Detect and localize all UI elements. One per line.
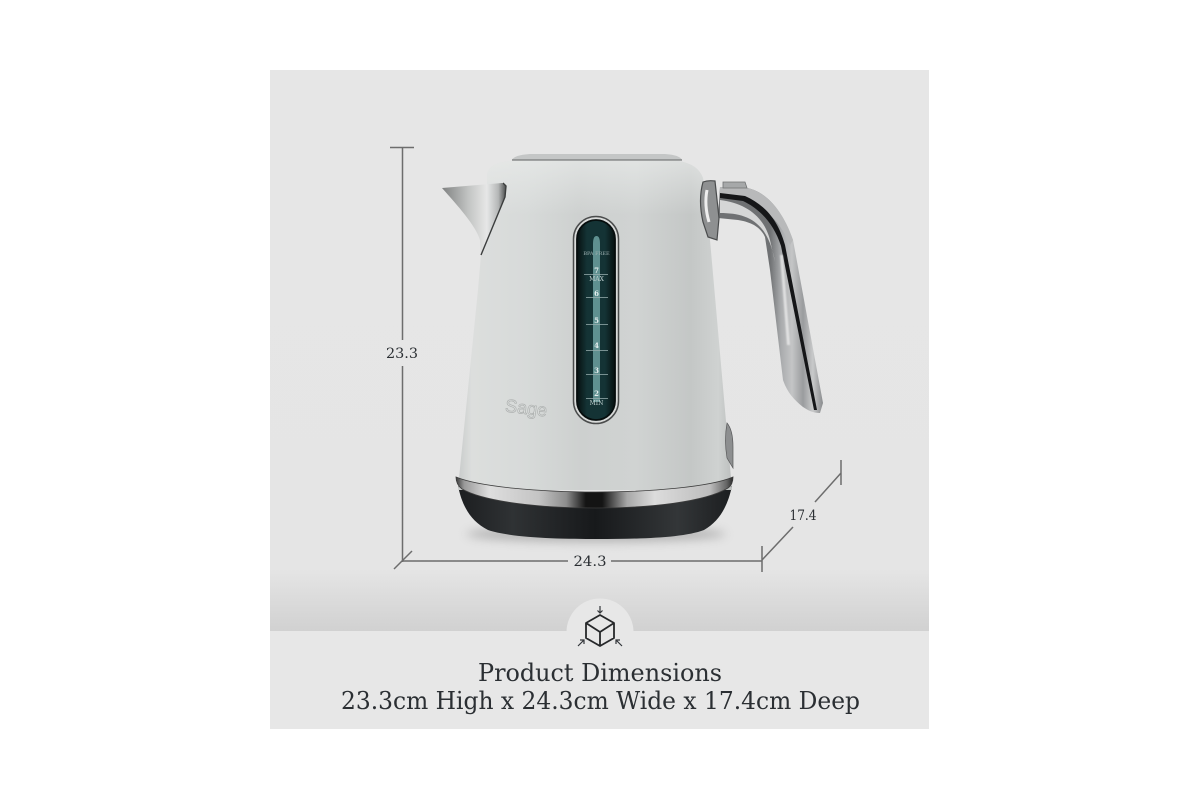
dimension: width: [394, 546, 762, 572]
icon badge: [566, 598, 634, 632]
gauge labels: BPA FREE: [583, 251, 610, 257]
window glass: [577, 220, 615, 420]
bracket highlight: [706, 190, 709, 222]
dimension: depth: [762, 460, 841, 560]
side switch: [726, 423, 733, 468]
width label: 24.3: [574, 554, 606, 570]
dimension: height: [386, 147, 418, 562]
window chrome frame: [574, 216, 618, 424]
height label: 23.3: [386, 346, 418, 362]
width line: [394, 546, 762, 572]
chrome band: [456, 477, 733, 508]
depth label: 17.4: [790, 508, 817, 524]
handle bracket: [700, 181, 719, 240]
panel: caption footer: [270, 631, 929, 729]
handle chrome: [718, 187, 823, 413]
caption title: Product Dimensions: [478, 659, 722, 687]
depth line: [762, 460, 841, 560]
lid rim: [512, 159, 682, 161]
gauge labels: 3: [594, 366, 599, 375]
handle: [700, 181, 823, 413]
handle dark reflection: [720, 193, 817, 410]
kettle base: [458, 486, 732, 539]
caption: [341, 659, 860, 715]
gauge labels: 2: [594, 389, 599, 398]
kettle lid: [512, 154, 682, 160]
handle top sheen: [720, 187, 793, 245]
gauge labels: 5: [594, 316, 599, 325]
kettle body: [458, 161, 732, 490]
gauge labels: MIN: [590, 400, 603, 407]
height line: [390, 147, 414, 562]
cube: [586, 615, 614, 646]
panel: background: [270, 70, 929, 631]
gauge labels: 6: [594, 289, 599, 298]
gauge labels: MAX: [589, 276, 605, 283]
water window: [574, 216, 618, 424]
gauge labels: 7: [594, 266, 599, 275]
gauge labels: 4: [594, 341, 599, 350]
handle lower highlight: [780, 255, 790, 345]
kettle: [442, 154, 823, 542]
spout chrome: [442, 183, 506, 255]
brand logo: Sage: [504, 396, 548, 421]
spout edge: [481, 183, 506, 255]
gauge ticks: [584, 274, 608, 398]
icon: dimensions cube: [566, 598, 634, 646]
caption dimensions: 23.3cm High x 24.3cm Wide x 17.4cm Deep: [341, 687, 860, 715]
water gauge strip: [593, 236, 600, 402]
spout: [442, 183, 506, 255]
body top highlight: [481, 161, 708, 220]
compression arrows: [578, 606, 622, 646]
handle top button: [723, 182, 747, 188]
gauge labels: [583, 251, 610, 407]
kettle shadow: [466, 526, 726, 542]
